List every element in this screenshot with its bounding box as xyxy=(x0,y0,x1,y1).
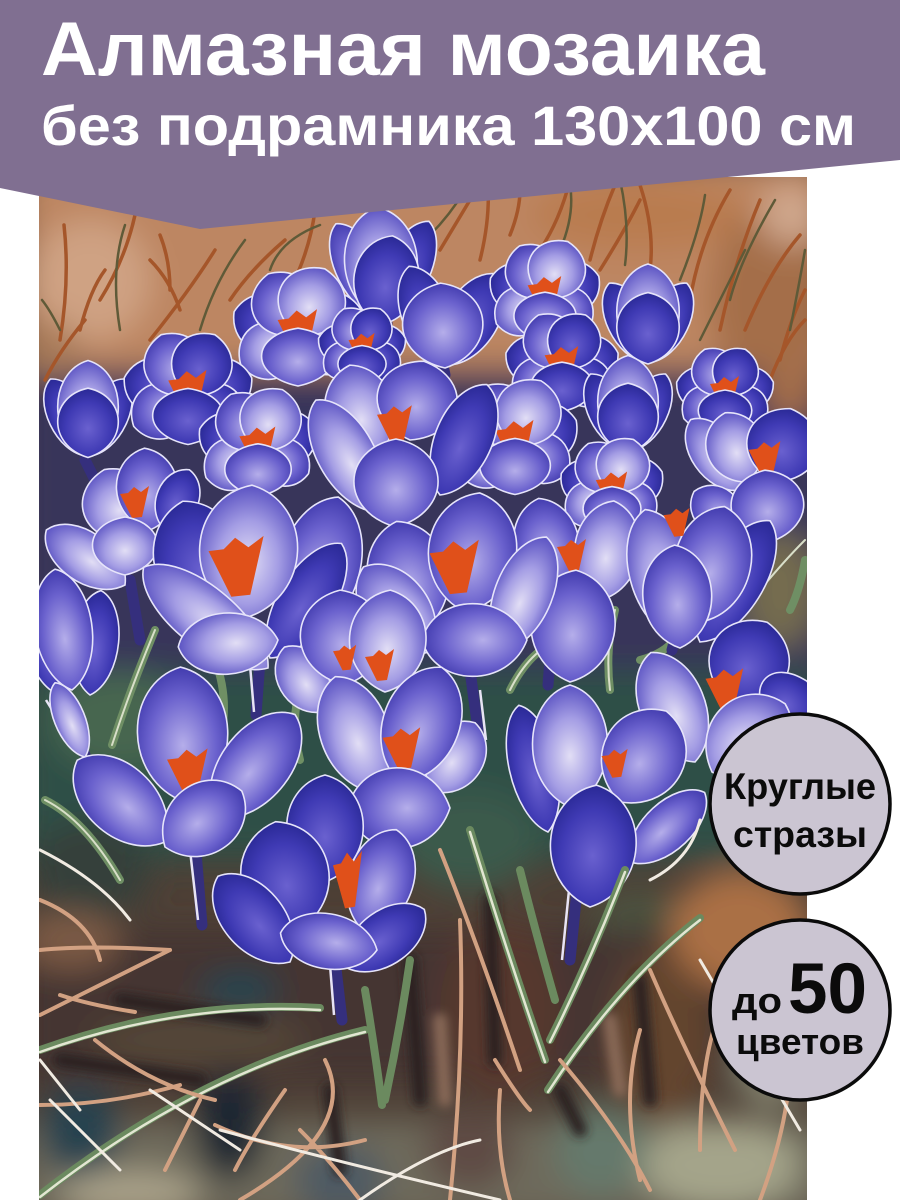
flower: top right dark xyxy=(602,263,694,365)
badge text: up to: до xyxy=(732,980,782,1021)
flower: right lower xyxy=(635,620,807,774)
flower: upper left pale xyxy=(232,266,360,387)
dry grass at top xyxy=(42,180,805,380)
subtitle: без подрамника 130х100 см xyxy=(41,94,856,157)
background colour washes xyxy=(20,160,830,1200)
stems xyxy=(60,300,680,1020)
badge circle xyxy=(710,920,890,1100)
soft dark streaks of soil xyxy=(60,900,650,1170)
badge text: colours: цветов xyxy=(736,1021,864,1062)
flower: right edge pale xyxy=(684,408,807,540)
flower: big left xyxy=(142,484,364,676)
flower: top right pale xyxy=(489,240,600,337)
flower: right of centre xyxy=(514,498,635,683)
flower: lower left big xyxy=(72,666,302,858)
flower: left edge lower xyxy=(39,568,120,757)
flower: small behind centre xyxy=(318,307,406,380)
flower: lower centre xyxy=(316,666,488,848)
flower: right dark centre xyxy=(582,355,674,447)
flower: upper left blue xyxy=(123,332,253,446)
flower: blue middle upper xyxy=(505,313,619,410)
flower: far right small xyxy=(676,348,774,424)
flower: small lilac xyxy=(198,388,312,494)
flower: left edge dark bud xyxy=(42,360,132,458)
flower: dark tulip shape xyxy=(397,266,498,369)
flower: centre white xyxy=(468,378,578,496)
flowers, back to front xyxy=(16,205,831,989)
flower: right blue xyxy=(626,506,778,649)
flower: big upper centre xyxy=(308,360,499,526)
badge: round rhinestones xyxy=(710,714,890,894)
green leaves behind flowers xyxy=(45,540,805,880)
long grass blades and needles xyxy=(40,820,800,1200)
badge text line 2: стразы xyxy=(733,814,867,855)
badge text line 1: Круглые xyxy=(724,766,876,807)
watercolor painting of crocuses xyxy=(16,160,831,1200)
header banner xyxy=(0,0,900,229)
badge number 50: 50 xyxy=(788,950,867,1029)
flower: top centre bud xyxy=(328,210,438,322)
badge circle xyxy=(710,714,890,894)
badge: up to 50 colours xyxy=(710,920,890,1100)
flower: centre behind xyxy=(274,589,427,714)
flower: big centre xyxy=(355,492,559,678)
flower: lower right cup xyxy=(506,684,708,908)
banner shape with chevron xyxy=(0,0,900,229)
flower: left pale xyxy=(44,447,201,590)
painting base wash xyxy=(39,177,807,1200)
flower: behind right centre xyxy=(560,438,664,526)
flower: bottom dark blue xyxy=(212,774,427,973)
title: Алмазная мозаика xyxy=(41,7,766,92)
